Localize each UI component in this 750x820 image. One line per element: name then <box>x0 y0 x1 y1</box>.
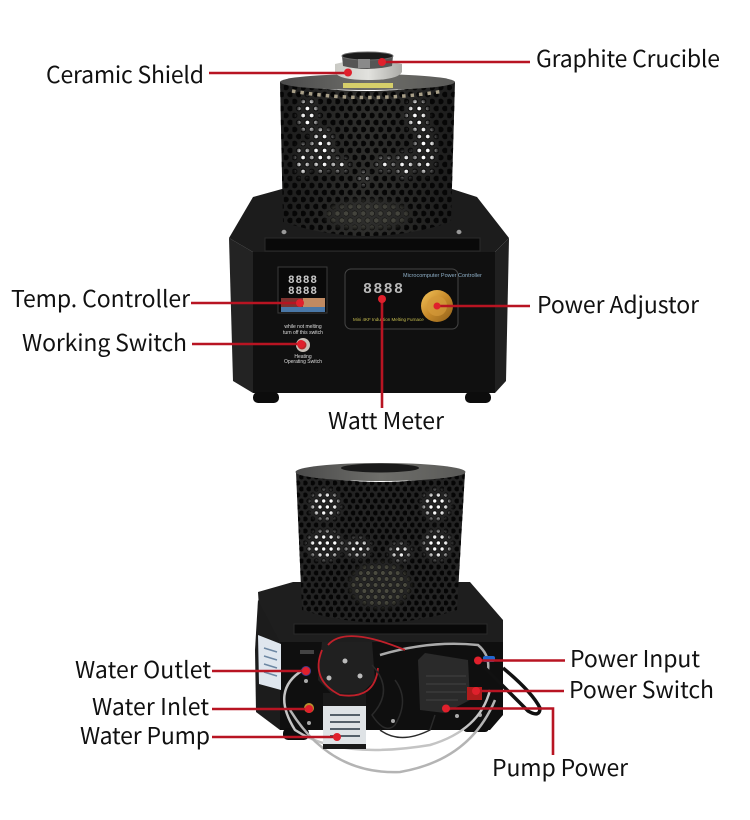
label: Graphite Crucible: Graphite Crucible <box>536 40 720 74</box>
temperature controller: 8888 <box>288 286 317 298</box>
power switch <box>467 687 482 700</box>
label: Working Switch: Working Switch <box>22 324 187 358</box>
working switch: Heating <box>294 354 312 360</box>
label: Watt Meter: Watt Meter <box>328 402 444 436</box>
temperature controller <box>278 267 327 313</box>
working switch: while not melting <box>284 324 322 330</box>
label: Water Inlet <box>92 688 313 722</box>
water tubing <box>284 644 495 772</box>
label: Power Switch <box>472 671 714 705</box>
photo: front view of melting furnace <box>229 52 509 403</box>
temperature controller: 8888 <box>288 275 317 287</box>
power input cable <box>483 656 540 714</box>
ceramic shield <box>335 60 402 88</box>
label: Power Switch: Power Switch <box>569 671 714 705</box>
water pump <box>318 642 375 749</box>
label: Temp. Controller: Temp. Controller <box>11 280 190 314</box>
working switch: Operating Switch <box>284 359 322 365</box>
power controller panel: Microcomputer Power Controller <box>403 273 482 279</box>
power controller panel: 8888 <box>363 281 403 298</box>
label: Working Switch <box>22 324 305 358</box>
label: Watt Meter <box>328 295 444 436</box>
back rubber feet <box>283 722 489 740</box>
graphite crucible <box>342 52 393 69</box>
label: Water Inlet: Water Inlet <box>92 688 209 722</box>
pump wiring <box>319 636 435 738</box>
label: Ceramic Shield: Ceramic Shield <box>46 56 204 90</box>
label: Water Outlet: Water Outlet <box>75 651 211 685</box>
label: Water Outlet <box>75 651 310 685</box>
furnace top plate <box>229 189 509 252</box>
perforated cylinder <box>280 74 455 236</box>
photo: back view of melting furnace <box>255 462 540 772</box>
label: Pump Power <box>442 704 628 783</box>
back perforated cylinder <box>296 463 466 622</box>
power adjustor knob <box>421 290 453 322</box>
back base body <box>255 600 503 730</box>
label: Water Pump: Water Pump <box>80 717 210 751</box>
back top plate <box>258 582 503 642</box>
pump power adapter <box>418 653 470 713</box>
label: Power Input <box>474 640 700 674</box>
water connectors <box>301 666 314 713</box>
label: Temp. Controller <box>11 280 304 314</box>
label: Power Input: Power Input <box>570 640 700 674</box>
furnace base body <box>229 230 509 393</box>
label: Graphite Crucible <box>378 40 720 74</box>
label: Water Pump <box>80 717 341 751</box>
working switch: turn off this switch <box>283 330 323 336</box>
power controller panel <box>345 269 482 329</box>
rubber feet <box>253 392 491 403</box>
label: Ceramic Shield <box>46 56 352 90</box>
working switch <box>283 324 323 365</box>
power controller panel: Mini 4KF Induction Melting Furnace <box>353 317 424 322</box>
label: Power Adjustor <box>434 286 699 320</box>
label: Power Adjustor: Power Adjustor <box>537 286 699 320</box>
label: Pump Power: Pump Power <box>492 749 628 783</box>
